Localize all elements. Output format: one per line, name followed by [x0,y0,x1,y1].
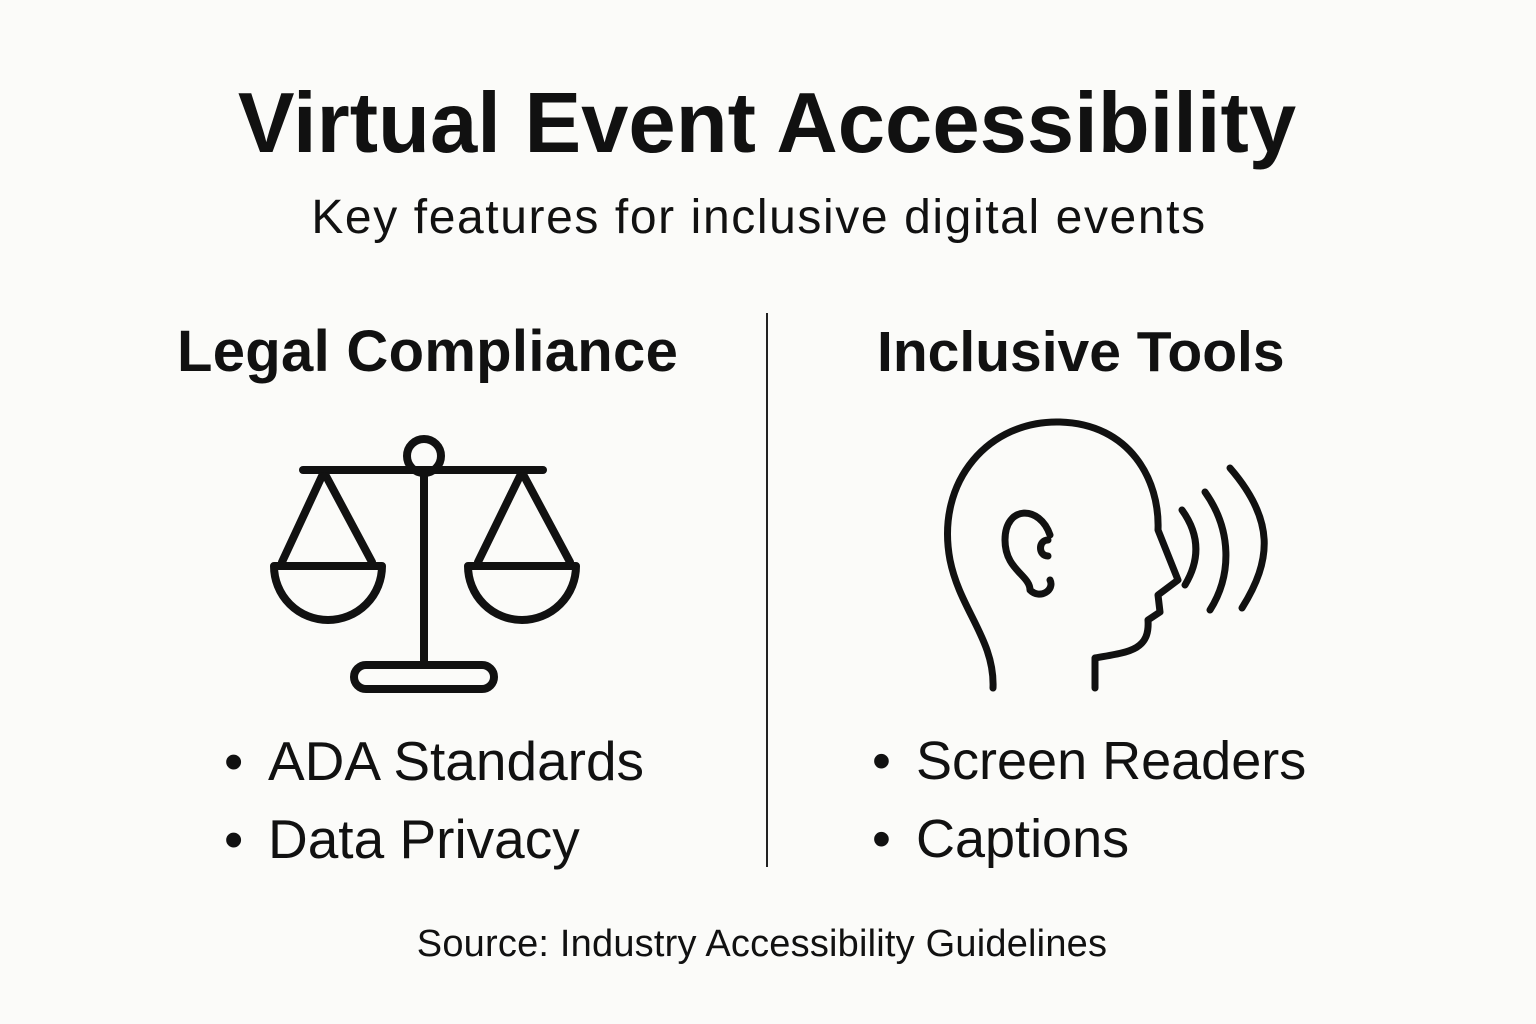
list: tools: Screen Readers [916,731,1306,791]
source: Source: Industry Accessibility Guidelines [417,923,1107,965]
list: legal: • [224,730,243,792]
icon: speaking head [944,418,1268,692]
list: tools: Captions [916,809,1129,869]
heading: legal compliance: Legal Compliance [177,319,678,384]
heading: inclusive tools: Inclusive Tools [877,320,1285,384]
list: legal [224,730,644,870]
divider [766,313,768,867]
title: Virtual Event Accessibility [238,76,1296,171]
subtitle: Key features for inclusive digital events [311,191,1207,244]
list: tools [872,731,1306,869]
list: legal: Data Privacy [268,808,580,870]
icon: scales [270,435,580,693]
list: legal: ADA Standards [268,730,644,792]
list: legal: • [224,808,243,870]
list: tools: • [872,809,891,869]
list: tools: • [872,731,891,791]
